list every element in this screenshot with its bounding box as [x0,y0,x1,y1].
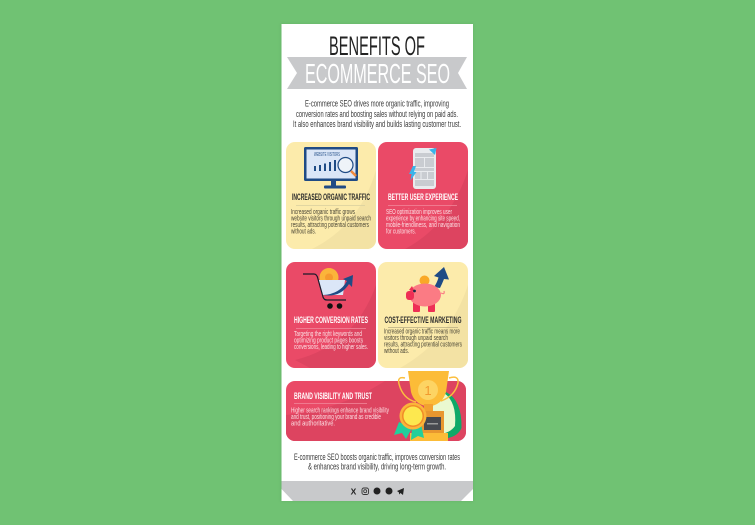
panel: better user experience [378,142,468,249]
icon: x: X [351,486,357,496]
body text: without ads. [290,226,316,236]
body text: mobile-friendliness, and navigation [386,220,460,229]
panel: increased organic traffic [286,142,376,249]
body text: conversions, leading to higher sales. [294,342,368,351]
icon: facebook [386,488,392,494]
body text: experience by enhancing site speed, [386,214,460,222]
body text: Targeting the right keywords and [294,329,362,338]
footer band [282,481,473,501]
body text: without ads. [383,346,409,355]
body text [383,326,462,355]
icon: trophy with medal [394,371,462,441]
icon: smartphone [409,148,436,189]
body text [290,207,371,236]
panel: cost-effective marketing [378,262,468,368]
body text: website visitors through unpaid search [290,214,371,222]
body text: visitors through unpaid search [384,333,448,342]
panel: higher conversion rates [286,262,376,368]
icon: piggy bank [406,267,449,312]
heading: BETTER USER EXPERIENCE [388,192,458,203]
title line 1: BENEFITS OF [329,31,425,61]
intro text: It also enhances brand visibility and builds lasting customer trust. [293,119,461,129]
heading: COST-EFFECTIVE MARKETING [384,315,462,326]
body text: and authoritative. [291,418,335,428]
icon: spotify [374,488,380,494]
icon: monitor with magnifier: WEBSITE VISITORS [314,152,340,158]
intro text [293,98,461,129]
body text: optimizing product pages boosts [294,336,363,344]
panel: brand visibility and trust [286,371,466,441]
social icons [351,486,404,496]
closing text: E-commerce SEO boosts organic traffic, improves conversion rates [294,452,460,462]
icon: telegram [397,488,404,495]
icon: shopping cart [303,268,353,309]
heading: HIGHER CONVERSION RATES [294,315,368,326]
intro text: E-commerce SEO drives more organic traffic, improving [305,98,449,108]
intro text: conversion rates and boosting sales without relying on paid ads. [296,109,458,119]
closing text: & enhances brand visibility, driving long-term growth. [308,462,446,472]
page sheet [281,24,473,501]
body text: results, attracting potential customers [384,340,462,348]
body text [294,329,368,351]
title ribbon [287,57,467,89]
body text [386,207,460,236]
body text: SEO optimization improves user [386,207,452,216]
heading: BRAND VISIBILITY AND TRUST [294,391,372,402]
body text: Increased organic traffic grows [291,207,355,216]
icon: trophy with medal: 1 [424,383,432,398]
title line 2: ECOMMERCE SEO [305,58,450,89]
icon: instagram [362,488,368,494]
body text: Higher search rankings enhance brand visibility [291,406,389,414]
body text [291,406,389,428]
heading: INCREASED ORGANIC TRAFFIC [292,192,370,203]
body text: Increased organic traffic means more [384,326,460,336]
body text: and trust, positioning your brand as credible [291,412,381,421]
body text: results, attracting potential customers [291,220,369,229]
closing text [294,452,460,472]
body text: for customers. [386,226,416,236]
